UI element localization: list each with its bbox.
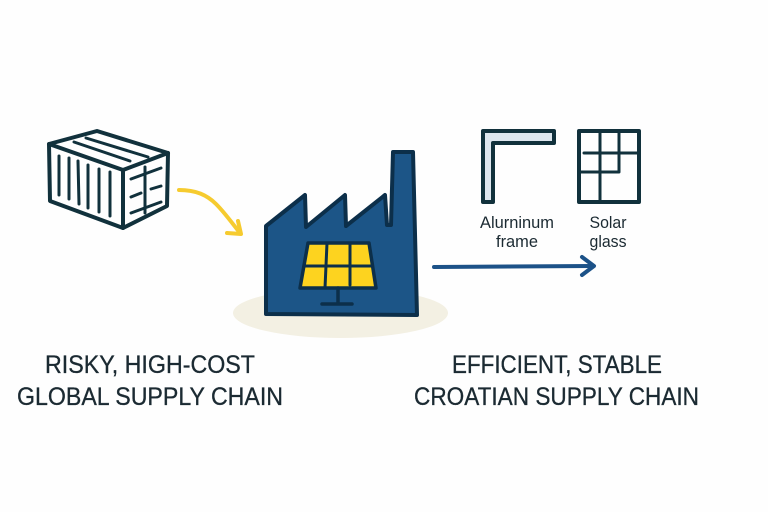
heading: global supply chain: RISKY, HIGH-COST [45, 351, 255, 379]
arrow: yellow arrow into factory [179, 190, 241, 234]
heading: global supply chain [17, 351, 283, 411]
icon: solar glass [579, 131, 639, 202]
heading: global supply chain: GLOBAL SUPPLY CHAIN [17, 383, 283, 411]
label: aluminum frame: frame [496, 232, 538, 251]
icon: aluminum frame [483, 131, 554, 202]
ground shadow ellipse [233, 288, 448, 338]
arrow: blue arrow to components [434, 257, 594, 275]
heading: croatian supply chain: CROATIAN SUPPLY CHAIN [414, 383, 699, 411]
icon: shipping container [49, 131, 168, 228]
label: aluminum frame: Alurninum [480, 213, 554, 232]
heading: croatian supply chain: EFFICIENT, STABLE [452, 351, 662, 379]
icon: solar panel [300, 243, 376, 304]
icon: factory with solar panel [266, 152, 417, 315]
heading: croatian supply chain [414, 351, 699, 411]
label: solar glass: glass [590, 232, 626, 251]
label: solar glass: Solar [590, 213, 627, 232]
